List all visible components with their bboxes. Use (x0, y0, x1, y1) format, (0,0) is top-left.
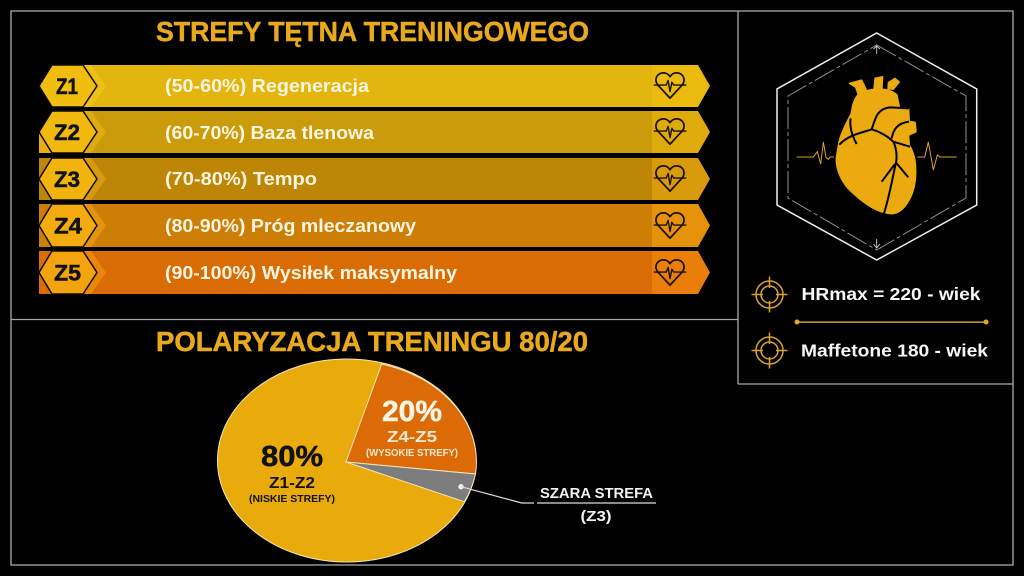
zone bar Z1 (39, 65, 710, 107)
zone bar Z5: Z5 (54, 260, 81, 286)
icon: heart Z2 (654, 119, 686, 144)
icon: heart Z4 (654, 213, 686, 238)
icon: heart in hexagon (777, 33, 977, 260)
pie chart (217, 359, 476, 562)
label: Z4-Z5: Z4-Z5 (387, 429, 437, 446)
icon: heart Z5 (654, 260, 686, 285)
icon: heart Z3 (654, 166, 686, 191)
zone bar Z2 (39, 111, 710, 153)
callout: grey zone (458, 484, 656, 525)
label: 20%: 20% (382, 396, 442, 428)
zone bar Z1: Z1 (56, 74, 78, 99)
zone bar Z5 (39, 251, 710, 294)
zone bar Z2: (60-70%) Baza tlenowa (165, 123, 375, 143)
divider with dots (794, 320, 988, 324)
zone bar Z4: (80-90%) Próg mleczanowy (165, 216, 416, 236)
label: wysokie strefy: (WYSOKIE STREFY) (366, 448, 458, 459)
icon: heart Z1 (654, 73, 686, 98)
zone bar Z3: (70-80%) Tempo (165, 169, 317, 189)
label: 80%: 80% (261, 441, 323, 473)
zone bar Z5: (90-100%) Wysiłek maksymalny (165, 263, 457, 283)
label: niskie strefy: (NISKIE STREFY) (249, 493, 335, 505)
zone bar Z3 (39, 158, 710, 200)
pie slice: grey zone (346, 462, 476, 502)
pie slice: 20% (346, 364, 476, 474)
callout: grey zone: (Z3) (580, 509, 612, 525)
formula: Maffetone: Maffetone 180 - wiek (801, 340, 988, 360)
zone bar Z4 (39, 204, 710, 247)
callout: grey zone: SZARA STREFA (540, 486, 654, 502)
zone bar Z3: Z3 (54, 167, 80, 192)
label: Z1-Z2: Z1-Z2 (269, 475, 315, 492)
zone bar Z2: Z2 (54, 120, 80, 145)
zone bar Z4: Z4 (54, 214, 83, 238)
formula: HRmax: HRmax = 220 - wiek (802, 284, 981, 304)
title: zones: STREFY TĘTNA TRENINGOWEGO (156, 16, 589, 47)
icon: target 1 (752, 276, 788, 312)
icon: target 2 (752, 332, 788, 368)
zone bar Z1: (50-60%) Regeneracja (165, 76, 370, 96)
pie slice: 80% (217, 359, 476, 562)
title: polarization: POLARYZACJA TRENINGU 80/20 (156, 326, 588, 357)
